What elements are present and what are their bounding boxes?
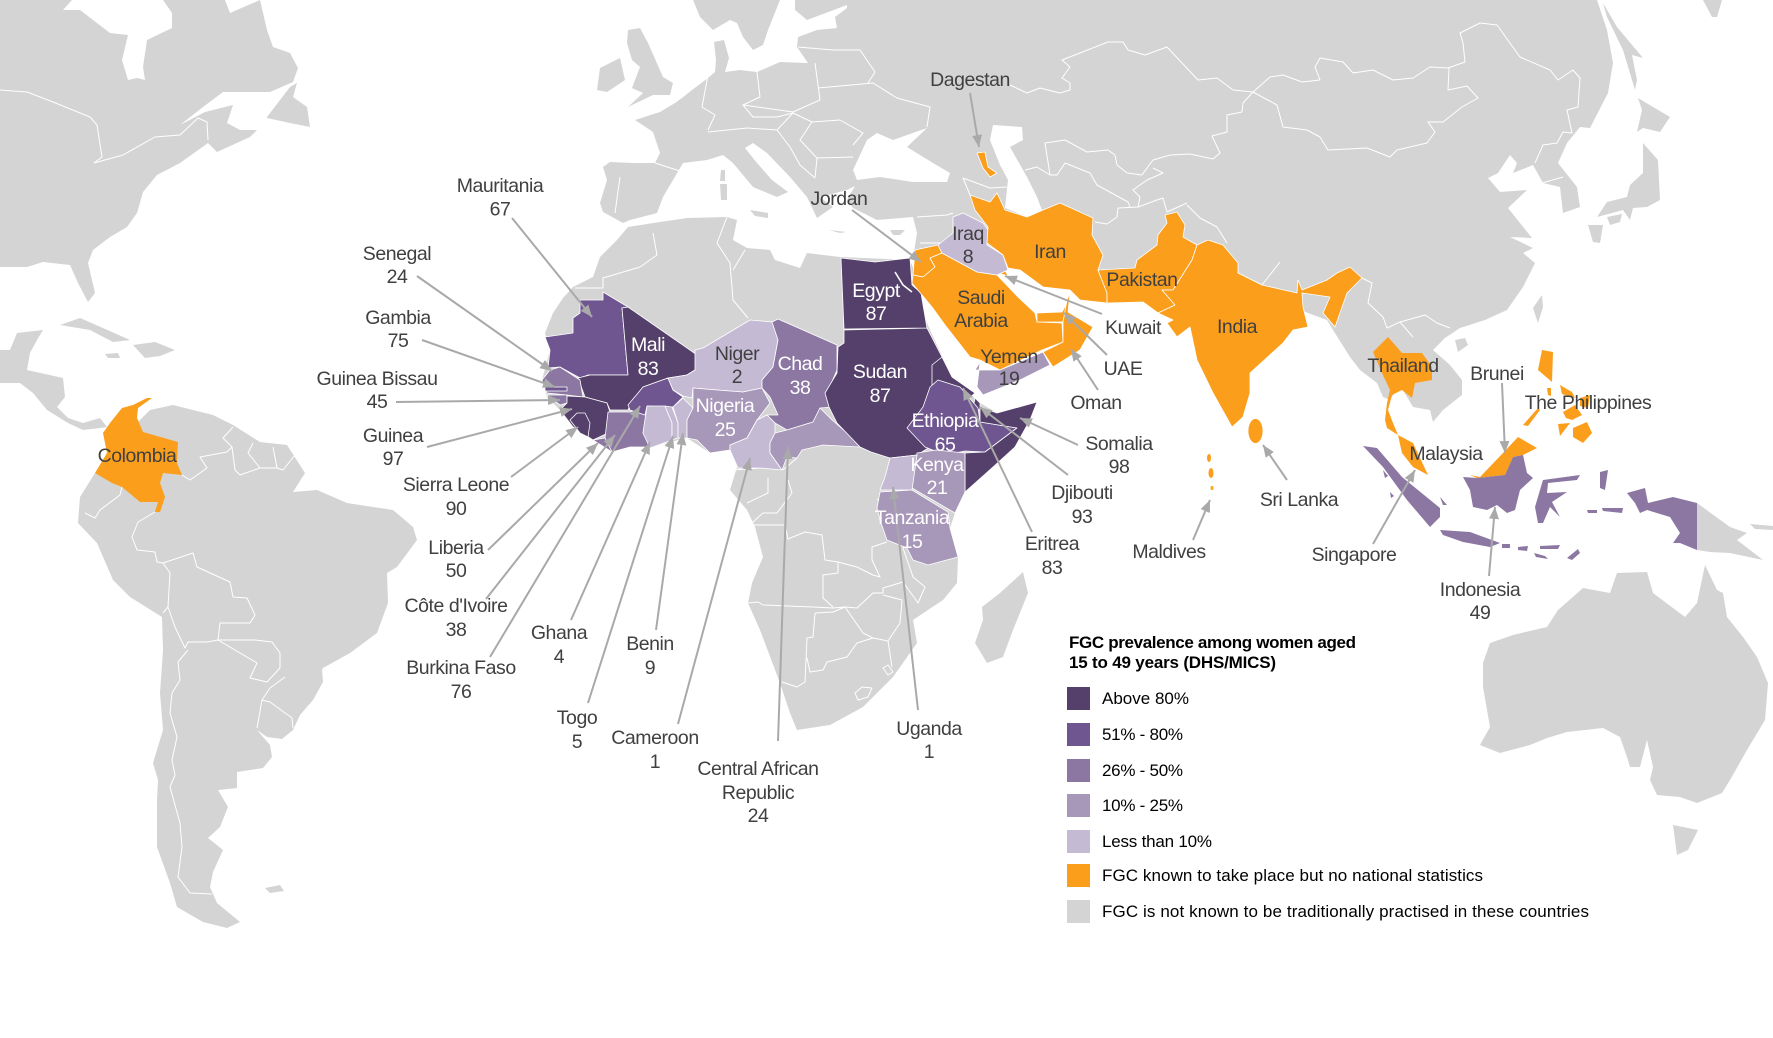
legend item: 26% - 50% bbox=[1067, 759, 1183, 782]
legend item: above 80% bbox=[1067, 687, 1189, 710]
arrow: Liberia bbox=[488, 443, 598, 550]
label: Tanzania 15: Tanzania bbox=[875, 507, 949, 529]
label: Kenya 21: Kenya bbox=[910, 454, 964, 476]
arrow: Jordan bbox=[852, 210, 921, 262]
Sudan shape bbox=[825, 328, 942, 458]
label: Niger 2: 2 bbox=[732, 366, 742, 388]
Guinea Bissau shape bbox=[547, 395, 567, 405]
Mali shape bbox=[578, 307, 697, 410]
Malaysia Borneo and Brunei shape bbox=[1470, 437, 1537, 478]
arrow: Togo bbox=[588, 436, 673, 703]
arrow: Benin bbox=[656, 433, 683, 630]
legend item: less than 10% bbox=[1067, 830, 1212, 853]
UAE shape bbox=[1037, 303, 1067, 322]
Cameroon shape bbox=[730, 415, 782, 470]
Gambia shape bbox=[545, 387, 567, 391]
arrow: Somalia bbox=[1020, 418, 1078, 445]
label: Togo 5: 5 bbox=[572, 731, 583, 753]
arrow: Uganda bbox=[893, 487, 918, 710]
arrow: Eritrea bbox=[963, 388, 1032, 532]
Chad shape bbox=[762, 319, 837, 430]
Benin shape bbox=[673, 398, 693, 438]
label: Colombia: Colombia bbox=[98, 445, 177, 467]
Dagestan shape bbox=[977, 152, 997, 177]
label: Maldives: Maldives bbox=[1132, 541, 1206, 563]
Thailand shape bbox=[1373, 337, 1432, 435]
label: Yemen 19: Yemen bbox=[980, 346, 1038, 368]
legend item: no national statistics: FGC known to take place but no national statistics bbox=[1102, 866, 1483, 885]
panel: Africa FGC-prevalence countries bbox=[542, 258, 1037, 565]
arrow: Djibouti bbox=[980, 407, 1068, 475]
label: Sudan 87: Sudan bbox=[853, 361, 907, 383]
label: Thailand: Thailand bbox=[1367, 355, 1439, 377]
legend item: not traditionally practised: FGC is not known to be traditionally practised in these countries bbox=[1102, 902, 1589, 921]
arrow: Indonesia bbox=[1489, 507, 1495, 576]
inland seas bbox=[853, 125, 1043, 217]
label: Sudan 87: 87 bbox=[870, 385, 890, 407]
label: Somalia 98: 98 bbox=[1109, 456, 1129, 478]
label: Guinea 97: 97 bbox=[383, 448, 403, 470]
label: Oman: Oman bbox=[1070, 392, 1122, 414]
arrow: Côte d'Ivoire bbox=[486, 435, 615, 599]
arrow: Sri Lanka bbox=[1263, 445, 1287, 480]
label: Mali 83: 83 bbox=[638, 358, 658, 380]
label: Guinea Bissau 45: Guinea Bissau bbox=[317, 368, 437, 390]
label: Tanzania 15: 15 bbox=[902, 531, 923, 553]
arrow: Gambia bbox=[422, 340, 555, 387]
label: Cameroon 1: Cameroon bbox=[611, 727, 699, 749]
Saudi Arabia shape bbox=[912, 253, 1063, 370]
label: Burkina Faso 76: 76 bbox=[451, 681, 471, 703]
arrow: UAE bbox=[1064, 313, 1107, 355]
label: Brunei: Brunei bbox=[1470, 363, 1524, 385]
label: Chad 38: 38 bbox=[790, 377, 810, 399]
Nigeria shape bbox=[687, 388, 770, 453]
Malaysia peninsular shape bbox=[1398, 435, 1428, 475]
legend title: FGC prevalence among women aged bbox=[1069, 633, 1356, 652]
legend item: 10% - 25%: 10% - 25% bbox=[1102, 796, 1183, 815]
label: Ethiopia 65: 65 bbox=[935, 434, 956, 456]
label: The Philippines: The Philippines bbox=[1525, 392, 1652, 414]
label: Djibouti 93: Djibouti bbox=[1051, 482, 1113, 504]
label: Egypt 87: Egypt bbox=[852, 280, 900, 302]
label: Kuwait: Kuwait bbox=[1105, 317, 1162, 339]
label: Mauritania 67: 67 bbox=[490, 198, 510, 220]
Jordan shape bbox=[913, 245, 942, 277]
label: Singapore: Singapore bbox=[1312, 544, 1396, 566]
arrow: Senegal bbox=[417, 276, 552, 371]
legend item: above 80%: Above 80% bbox=[1102, 689, 1189, 708]
Iran shape bbox=[970, 193, 1107, 303]
label: Sierra Leone 90: Sierra Leone bbox=[403, 474, 509, 496]
label: Nigeria 25: 25 bbox=[715, 419, 736, 441]
Egypt shape bbox=[841, 258, 927, 329]
label: Djibouti 93: 93 bbox=[1072, 506, 1092, 528]
arrow: Sierra Leone bbox=[511, 427, 578, 477]
label: Kenya 21: 21 bbox=[927, 477, 947, 499]
label: Dagestan: Dagestan bbox=[930, 69, 1010, 91]
label: Ghana 4: Ghana bbox=[531, 622, 587, 644]
arrow: Guinea bbox=[427, 409, 572, 447]
panel: legend bbox=[1067, 633, 1589, 923]
arrow: Brunei bbox=[1502, 383, 1505, 453]
label: Chad 38: Chad bbox=[778, 353, 822, 375]
label: Ethiopia 65: Ethiopia bbox=[912, 410, 978, 432]
arrow: Ghana bbox=[571, 442, 650, 620]
Senegal shape bbox=[542, 367, 583, 397]
label: Côte d'Ivoire 38: Côte d'Ivoire bbox=[404, 595, 508, 617]
label: Senegal 24: Senegal bbox=[363, 243, 431, 265]
label: Saudi Arabia: Arabia bbox=[954, 310, 1008, 332]
Niger shape bbox=[668, 320, 778, 398]
label: Malaysia: Malaysia bbox=[1409, 443, 1483, 465]
label: Eritrea 83: 83 bbox=[1042, 557, 1062, 579]
label: Pakistan: Pakistan bbox=[1106, 269, 1178, 291]
Sri Lanka shape bbox=[1248, 418, 1263, 444]
The Philippines shape bbox=[1523, 350, 1592, 443]
Central African Republic shape bbox=[770, 408, 860, 470]
India shape bbox=[1158, 240, 1362, 427]
country borders bbox=[0, 23, 1580, 894]
arrow: Cameroon bbox=[678, 458, 750, 724]
legend item: 26% - 50%: 26% - 50% bbox=[1102, 761, 1183, 780]
label: Somalia 98: Somalia bbox=[1085, 433, 1153, 455]
arrow: Guinea Bissau bbox=[396, 400, 560, 402]
Kenya shape bbox=[912, 450, 965, 513]
label: Indonesia 49: Indonesia bbox=[1440, 579, 1520, 601]
label: Jordan: Jordan bbox=[811, 188, 867, 210]
panel: South-East Asia countries bbox=[1363, 337, 1697, 560]
legend item: 51% - 80%: 51% - 80% bbox=[1102, 725, 1183, 744]
Togo shape bbox=[665, 406, 678, 440]
Liberia shape bbox=[593, 438, 612, 452]
Côte d'Ivoire shape bbox=[605, 407, 650, 452]
label: Gambia 75: Gambia bbox=[365, 307, 431, 329]
label: Togo 5: Togo bbox=[557, 707, 597, 729]
Yemen shape bbox=[975, 352, 1050, 395]
Iraq shape bbox=[938, 213, 1008, 275]
label: Benin 9: 9 bbox=[645, 657, 655, 679]
Burkina Faso shape bbox=[628, 378, 683, 415]
label: Indonesia 49: 49 bbox=[1470, 602, 1490, 624]
Sierra Leone shape bbox=[570, 413, 590, 437]
white Gulf of Suez line bbox=[895, 272, 912, 292]
Oman shape bbox=[1043, 293, 1093, 367]
Guinea shape bbox=[560, 396, 610, 440]
label: Cameroon 1: 1 bbox=[650, 751, 660, 773]
Maldives shape bbox=[1207, 454, 1214, 490]
arrow: Kuwait bbox=[1005, 276, 1102, 314]
label: India: India bbox=[1217, 316, 1258, 338]
label: Burkina Faso 76: Burkina Faso bbox=[406, 657, 516, 679]
Ghana shape bbox=[643, 406, 672, 448]
label: Guinea 97: Guinea bbox=[363, 425, 423, 447]
arrow: Maldives bbox=[1193, 500, 1210, 540]
arrow: Singapore bbox=[1373, 470, 1415, 544]
label: Uganda 1: 1 bbox=[924, 741, 934, 763]
label: Egypt 87: 87 bbox=[866, 303, 886, 325]
label: Ghana 4: 4 bbox=[554, 646, 565, 668]
Indonesia shape bbox=[1363, 446, 1697, 560]
Djibouti shape bbox=[973, 398, 980, 410]
label: Iraq 8: 8 bbox=[963, 246, 973, 268]
arrow: Mauritania bbox=[512, 218, 592, 317]
label: Liberia 50: 50 bbox=[446, 560, 467, 582]
label: Central African Republic 24: Republic bbox=[722, 782, 795, 804]
label: Gambia 75: 75 bbox=[388, 330, 409, 352]
Uganda shape bbox=[880, 455, 917, 490]
arrow: Burkina Faso bbox=[490, 406, 640, 657]
label: Iraq 8: Iraq bbox=[952, 223, 984, 245]
Ethiopia shape bbox=[907, 380, 1017, 455]
label: Liberia 50: Liberia bbox=[428, 537, 484, 559]
label: Eritrea 83: Eritrea bbox=[1025, 533, 1079, 555]
panel: Middle East and South Asia countries bbox=[912, 152, 1362, 444]
label: Saudi Arabia: Saudi bbox=[957, 287, 1005, 309]
legend item: 10% - 25% bbox=[1067, 794, 1183, 817]
arrow: Dagestan bbox=[970, 93, 979, 147]
legend item: 51% - 80% bbox=[1067, 723, 1183, 746]
label: Iran: Iran bbox=[1034, 241, 1066, 263]
label: Uganda 1: Uganda bbox=[896, 718, 962, 740]
Somalia shape bbox=[965, 402, 1037, 492]
arrow: Oman bbox=[1071, 349, 1098, 390]
label: Sri Lanka: Sri Lanka bbox=[1260, 489, 1339, 511]
Tanzania shape bbox=[877, 490, 958, 565]
label: Yemen 19: 19 bbox=[999, 368, 1019, 390]
label: Guinea Bissau 45: 45 bbox=[367, 391, 388, 413]
Mauritania shape bbox=[545, 292, 628, 378]
label: Mali 83: Mali bbox=[631, 334, 665, 356]
Eritrea shape bbox=[932, 357, 975, 398]
label: Central African Republic 24: 24 bbox=[748, 805, 769, 827]
Colombia shape bbox=[95, 398, 182, 512]
legend title: 15 to 49 years (DHS/MICS) bbox=[1069, 653, 1276, 672]
label: Benin 9: Benin bbox=[626, 633, 674, 655]
label: Mauritania 67: Mauritania bbox=[457, 175, 543, 197]
arrow: Central African Republic bbox=[778, 447, 788, 741]
label: Senegal 24: 24 bbox=[387, 266, 408, 288]
label: Sierra Leone 90: 90 bbox=[446, 498, 467, 520]
label: Nigeria 25: Nigeria bbox=[696, 395, 754, 417]
Kuwait shape bbox=[998, 270, 1008, 276]
label: Central African Republic 24: Central African bbox=[697, 758, 819, 780]
legend item: less than 10%: Less than 10% bbox=[1102, 832, 1212, 851]
label: UAE: UAE bbox=[1104, 358, 1143, 380]
label: Niger 2: Niger bbox=[715, 343, 759, 365]
label: Côte d'Ivoire 38: 38 bbox=[446, 619, 466, 641]
Pakistan shape bbox=[1098, 212, 1197, 313]
